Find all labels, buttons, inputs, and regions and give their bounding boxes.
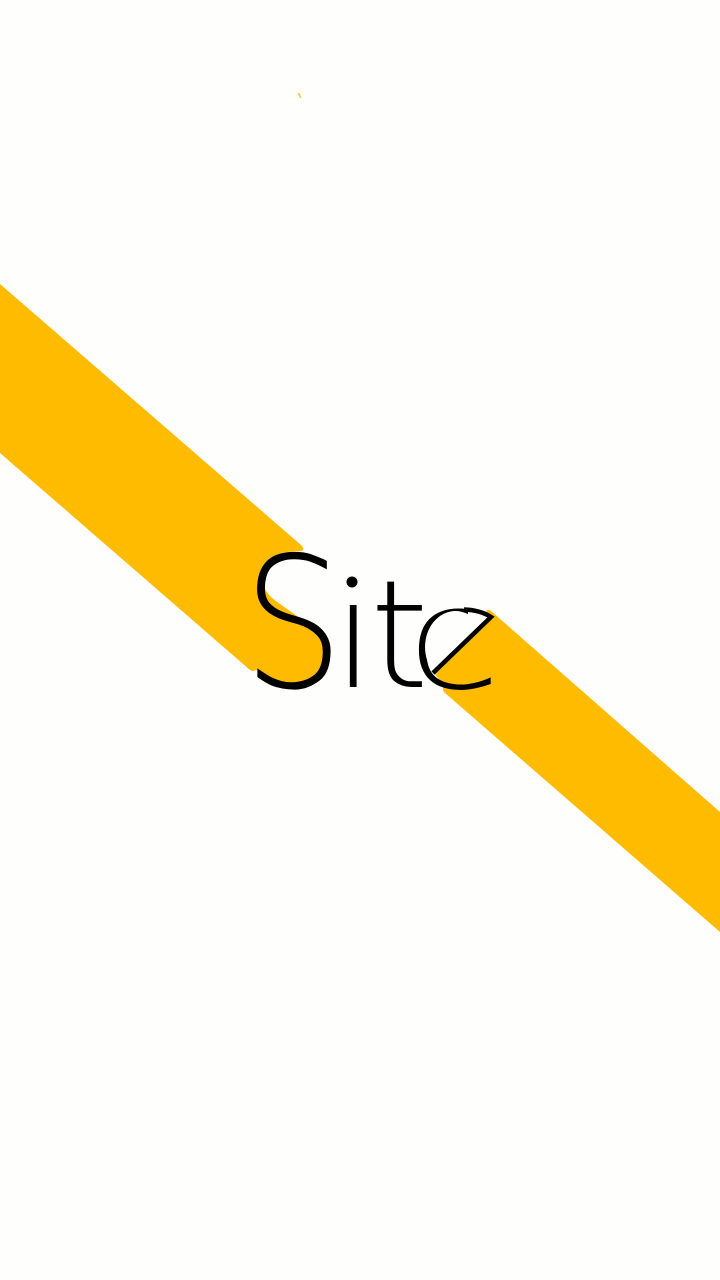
title word: Site: S bbox=[243, 519, 344, 731]
title word: Site: e bbox=[406, 557, 506, 722]
title word: Site: t bbox=[370, 549, 429, 723]
infographic canvas bbox=[0, 93, 720, 932]
title word: Site: i bbox=[333, 549, 375, 723]
lower diagonal yellow band bbox=[433, 610, 720, 932]
small yellow speck bbox=[298, 93, 302, 98]
title word: Site bbox=[257, 552, 494, 690]
upper diagonal yellow band bbox=[0, 284, 327, 688]
